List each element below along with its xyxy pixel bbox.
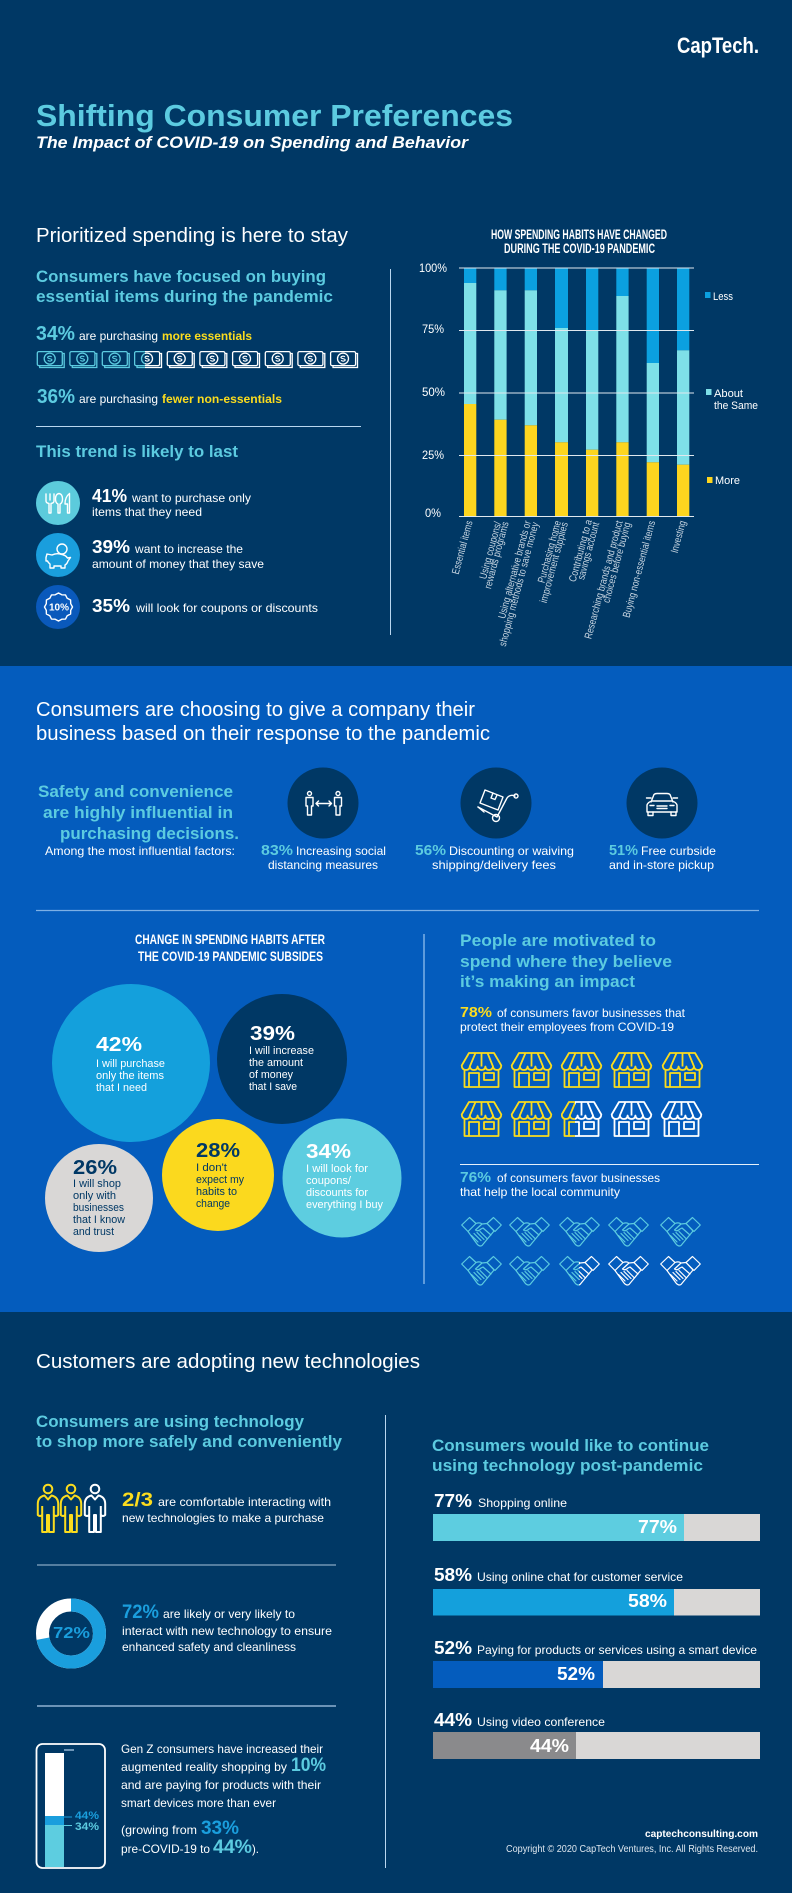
- stat: two thirds: 2/3: [122, 1490, 153, 1511]
- stat: 51 percent: 51%: [609, 842, 638, 859]
- stat: 39 percent: amount of money that they save: [92, 557, 264, 571]
- stat: 72 percent: enhanced safety and cleanliness: [122, 1640, 296, 1654]
- bubble chart: [45, 984, 402, 1252]
- bubble: 28 percent: habits to: [196, 1186, 237, 1198]
- text: Gen Z: ).: [252, 1842, 259, 1856]
- y axis labels: 100%: [419, 261, 447, 275]
- stat: 78 percent: of consumers favor businesses that: [497, 1006, 686, 1020]
- bar: online chat: [433, 1565, 760, 1616]
- callout: safety and convenience: Safety and convenience: [38, 782, 233, 801]
- subheading: essential items: Consumers have focused on buying: [36, 267, 326, 286]
- callout: safety and convenience: are highly influential in: [43, 803, 233, 822]
- bubble: 28 percent: 28%: [196, 1140, 240, 1162]
- text: Gen Z: augmented reality shopping by: [121, 1760, 287, 1774]
- stat: 72 percent: [122, 1602, 332, 1654]
- stat: 83 percent: [261, 842, 386, 872]
- chart title: [491, 227, 667, 256]
- bar: shopping online: [433, 1491, 760, 1541]
- stat: 34 percent more essentials: more essentials: [162, 329, 252, 343]
- subheading: shop safely: [36, 1412, 343, 1451]
- stat: 41 percent: want to purchase only: [131, 491, 251, 505]
- stat: 35 percent: will look for coupons or discounts: [135, 601, 318, 615]
- bubble: 28 percent: [162, 1119, 274, 1231]
- bubble: 26 percent: only with: [73, 1190, 116, 1202]
- stat: 35 percent: [92, 596, 318, 616]
- bubble chart title: CHANGE IN SPENDING HABITS AFTER: [135, 931, 325, 947]
- subheading: continue using technology: using technology post-pandemic: [432, 1456, 703, 1475]
- bars: non-essential items: [647, 268, 659, 516]
- stat: 72 percent: interact with new technology to ensure: [122, 1624, 332, 1638]
- bubble: 39 percent: 39%: [250, 1023, 295, 1045]
- chart legend: More: [715, 475, 740, 487]
- panel: essentials: [36, 267, 358, 408]
- bar: online chat: Using online chat for customer service: [477, 1570, 683, 1584]
- bubble chart title: [135, 931, 325, 964]
- stat: 34 percent more essentials: [36, 323, 252, 345]
- bars: investing: [677, 268, 689, 516]
- x axis labels: [450, 518, 689, 648]
- bar: smart device: 52%: [557, 1664, 595, 1684]
- donut chart: 72%: [53, 1625, 90, 1642]
- bars: coupons: [494, 268, 507, 516]
- bubble: 34 percent: [282, 1118, 402, 1238]
- subheading: essential items: essential items during the pandemic: [36, 287, 333, 306]
- stat: 56 percent: [415, 842, 574, 872]
- bar: video conference: 44%: [434, 1710, 472, 1730]
- bubble: 28 percent: I don't: [196, 1162, 227, 1174]
- icon: phone chart: 34%: [75, 1821, 99, 1833]
- bars: researching brands: [616, 268, 629, 516]
- bubble: 42 percent: only the items: [96, 1070, 164, 1082]
- stat: two thirds: new technologies to make a purchase: [122, 1511, 324, 1525]
- icon: delivery cart: [460, 768, 532, 838]
- bubble: 34 percent: coupons/: [306, 1175, 352, 1187]
- text: Gen Z: and are paying for products with their: [121, 1778, 321, 1792]
- chart title: HOW SPENDING HABITS HAVE CHANGED: [491, 227, 667, 242]
- x axis labels: Using coupons/: [477, 520, 504, 580]
- stat: 51 percent: and in-store pickup: [609, 858, 714, 872]
- stat: 36 percent fewer non-essentials: [37, 386, 282, 408]
- heading: company response: business based on their response to the pandemic: [36, 723, 490, 745]
- bar: smart device: Paying for products or services using a smart device: [477, 1643, 757, 1657]
- bubble: 26 percent: and trust: [73, 1226, 114, 1238]
- bubble: 42 percent: I will purchase: [96, 1058, 165, 1070]
- callout: safety and convenience: [38, 782, 239, 858]
- chart legend: [705, 291, 758, 487]
- stat: 51 percent: [609, 842, 716, 872]
- stat: 83 percent: 83%: [261, 842, 293, 859]
- x axis labels: rewards programs: [482, 520, 512, 590]
- icons: handshakes: [462, 1218, 700, 1285]
- icons: money row: [37, 352, 358, 368]
- bubble: 34 percent: everything I buy: [306, 1199, 383, 1211]
- x axis labels: Buying non-essential items: [621, 519, 658, 619]
- bubble: 39 percent: of money: [249, 1069, 293, 1081]
- x axis labels: Investing: [669, 519, 689, 554]
- x axis labels: Contributing to a: [567, 518, 595, 583]
- stat: 39 percent: [92, 537, 264, 571]
- subheading: continue using technology: [432, 1436, 709, 1475]
- bar: shopping online: Shopping online: [478, 1496, 567, 1510]
- icon: social distancing: [288, 768, 358, 838]
- bubble: 26 percent: businesses: [73, 1202, 124, 1214]
- footer: Copyright © 2020 CapTech Ventures, Inc. All Rights Reserved.: [506, 1844, 758, 1855]
- title: Shifting Consumer Preferences: [36, 98, 513, 133]
- stat: 56 percent: 56%: [415, 842, 446, 859]
- stat: 78 percent: protect their employees from COVID-19: [460, 1020, 674, 1034]
- title: [36, 98, 513, 152]
- x axis labels: choices before buying: [601, 521, 634, 604]
- stat: 41 percent: 41%: [92, 486, 127, 506]
- subheading: motivated to spend: [460, 931, 672, 991]
- icons: people: [38, 1485, 105, 1532]
- text: Gen Z: [121, 1742, 326, 1858]
- stat: 83 percent: distancing measures: [268, 858, 378, 872]
- heading: company response: Consumers are choosing to give a company their: [36, 699, 475, 721]
- subheading: motivated to spend: spend where they believe: [460, 952, 672, 971]
- bubble: 42 percent: 42%: [96, 1034, 142, 1056]
- y axis labels: 0%: [425, 506, 441, 520]
- stat: 36 percent fewer non-essentials: fewer non-essentials: [162, 392, 282, 406]
- stat: 78 percent: 78%: [460, 1004, 492, 1021]
- stat: 56 percent: Discounting or waiving: [449, 844, 574, 858]
- bubble: 26 percent: I will shop: [73, 1178, 121, 1190]
- text: Gen Z: (growing from: [121, 1823, 197, 1837]
- subheading: continue using technology: Consumers would like to continue: [432, 1436, 709, 1455]
- chart legend: Less: [713, 291, 733, 303]
- bar: video conference: [433, 1710, 760, 1759]
- heading: company response: [36, 699, 490, 745]
- stat: 41 percent: [92, 486, 251, 519]
- callout: safety and convenience: Among the most influential factors:: [45, 844, 235, 858]
- subheading: shop safely: Consumers are using technology: [36, 1412, 305, 1431]
- stat: 51 percent: Free curbside: [641, 844, 716, 858]
- subheading: essential items: [36, 267, 333, 306]
- donut chart: [42, 1605, 100, 1662]
- panel: header and spending background: [0, 0, 792, 666]
- stat: 72 percent: are likely or very likely to: [163, 1607, 295, 1621]
- footer: captechconsulting.com: [645, 1828, 758, 1840]
- bars: home improvement: [555, 268, 568, 516]
- bar: online chat: 58%: [628, 1591, 667, 1611]
- stat: 34 percent more essentials: 34%: [36, 323, 75, 345]
- stat: 76 percent: [460, 1169, 660, 1199]
- bar: smart device: 52%: [434, 1638, 472, 1658]
- text: Gen Z: 44%: [213, 1837, 252, 1858]
- bubble: 34 percent: discounts for: [306, 1187, 368, 1199]
- stat: 39 percent: 39%: [92, 537, 130, 557]
- stat: 35 percent: 35%: [92, 596, 130, 616]
- bubble: 34 percent: I will look for: [306, 1163, 368, 1175]
- icons: stores: [462, 1053, 702, 1136]
- panel: company response background: [0, 666, 792, 1312]
- bubble: 26 percent: that I know: [73, 1214, 125, 1226]
- bars: essential items: [464, 268, 476, 516]
- subheading: trend: This trend is likely to last: [36, 442, 238, 461]
- y axis labels: [419, 261, 447, 520]
- stat: 78 percent: [460, 1004, 686, 1034]
- stat: 83 percent: Increasing social: [296, 844, 386, 858]
- subheading: shop safely: to shop more safely and conveniently: [36, 1432, 343, 1451]
- stat: 76 percent: 76%: [460, 1169, 491, 1186]
- x axis labels: savings account: [575, 521, 602, 581]
- heading: new technologies: Customers are adopting new technologies: [36, 1351, 420, 1373]
- bubble: 42 percent: that I need: [96, 1082, 147, 1094]
- stat: two thirds: [122, 1490, 331, 1525]
- stat: 36 percent fewer non-essentials: are purchasing: [79, 392, 158, 406]
- icon: coupon badge: 10%: [49, 602, 69, 614]
- text: Gen Z: 33%: [201, 1818, 239, 1839]
- icon: car: [626, 768, 698, 838]
- chart legend: About: [714, 388, 743, 400]
- y axis labels: 75%: [422, 322, 444, 336]
- bubble: 39 percent: I will increase: [249, 1045, 314, 1057]
- bar: shopping online: 77%: [638, 1517, 677, 1537]
- x axis labels: Using alternative brands or: [496, 519, 534, 620]
- bar: smart device: [433, 1638, 760, 1688]
- text: Gen Z: smart devices more than ever: [121, 1796, 276, 1810]
- stat: 41 percent: items that they need: [92, 505, 202, 519]
- bars: alternative brands: [525, 268, 537, 516]
- x axis labels: Purchasing home: [536, 519, 564, 584]
- x axis labels: Essential items: [450, 519, 476, 576]
- text: Gen Z: pre-COVID-19 to: [121, 1842, 210, 1856]
- stat: 72 percent: 72%: [122, 1602, 159, 1623]
- icon: cutlery: [36, 481, 80, 525]
- bar: shopping online: 77%: [434, 1491, 472, 1511]
- callout: safety and convenience: purchasing decisions.: [60, 824, 239, 843]
- stat: 34 percent more essentials: are purchasing: [79, 329, 158, 343]
- text: Gen Z: 10%: [291, 1755, 326, 1776]
- footer: [506, 1828, 758, 1855]
- x axis labels: shopping methods to save money: [497, 520, 542, 648]
- y axis labels: 25%: [422, 448, 444, 462]
- bar: video conference: Using video conference: [477, 1715, 605, 1729]
- bubble: 39 percent: [217, 994, 347, 1124]
- icon: coupon badge: [36, 585, 80, 629]
- icon: phone chart: [36, 1744, 105, 1868]
- title: The Impact of COVID-19 on Spending and Behavior: [36, 133, 469, 152]
- bubble: 42 percent: [52, 984, 210, 1142]
- subheading: motivated to spend: People are motivated to: [460, 931, 656, 950]
- y axis labels: 50%: [422, 385, 445, 399]
- icon: phone chart: 44%: [75, 1810, 99, 1822]
- bubble chart title: THE COVID-19 PANDEMIC SUBSIDES: [138, 948, 323, 964]
- stacked bar chart: [419, 261, 694, 648]
- bubble: 39 percent: the amount: [249, 1057, 303, 1069]
- stat: 56 percent: shipping/delivery fees: [432, 858, 556, 872]
- x axis labels: Researching brands and product: [582, 519, 626, 640]
- bars: savings account: [586, 268, 598, 516]
- chart legend: the Same: [714, 400, 758, 412]
- stat: 39 percent: want to increase the: [134, 542, 243, 556]
- subheading: motivated to spend: it’s making an impact: [460, 972, 635, 991]
- bubble: 28 percent: expect my: [196, 1174, 244, 1186]
- logo: CapTech.: [677, 33, 759, 58]
- text: Gen Z: Gen Z consumers have increased their: [121, 1742, 323, 1756]
- stat: 36 percent fewer non-essentials: 36%: [37, 386, 75, 408]
- bar: video conference: 44%: [530, 1736, 569, 1756]
- bubble: 28 percent: change: [196, 1198, 230, 1210]
- chart title: DURING THE COVID-19 PANDEMIC: [504, 241, 655, 256]
- bubble: 26 percent: 26%: [73, 1157, 117, 1179]
- bar: online chat: 58%: [434, 1565, 472, 1585]
- panel: technology background: [0, 1312, 792, 1893]
- stat: 76 percent: that help the local community: [460, 1185, 620, 1199]
- bubble: 34 percent: 34%: [306, 1141, 351, 1163]
- heading: prioritized spending: Prioritized spending is here to stay: [36, 225, 348, 247]
- icon: piggy bank: [36, 533, 80, 577]
- x axis labels: improvement supplies: [538, 521, 571, 604]
- stat: two thirds: are comfortable interacting with: [158, 1495, 331, 1509]
- stat: 76 percent: of consumers favor businesses: [497, 1171, 660, 1185]
- bubble: 39 percent: that I save: [249, 1081, 297, 1093]
- bubble: 26 percent: [45, 1144, 153, 1252]
